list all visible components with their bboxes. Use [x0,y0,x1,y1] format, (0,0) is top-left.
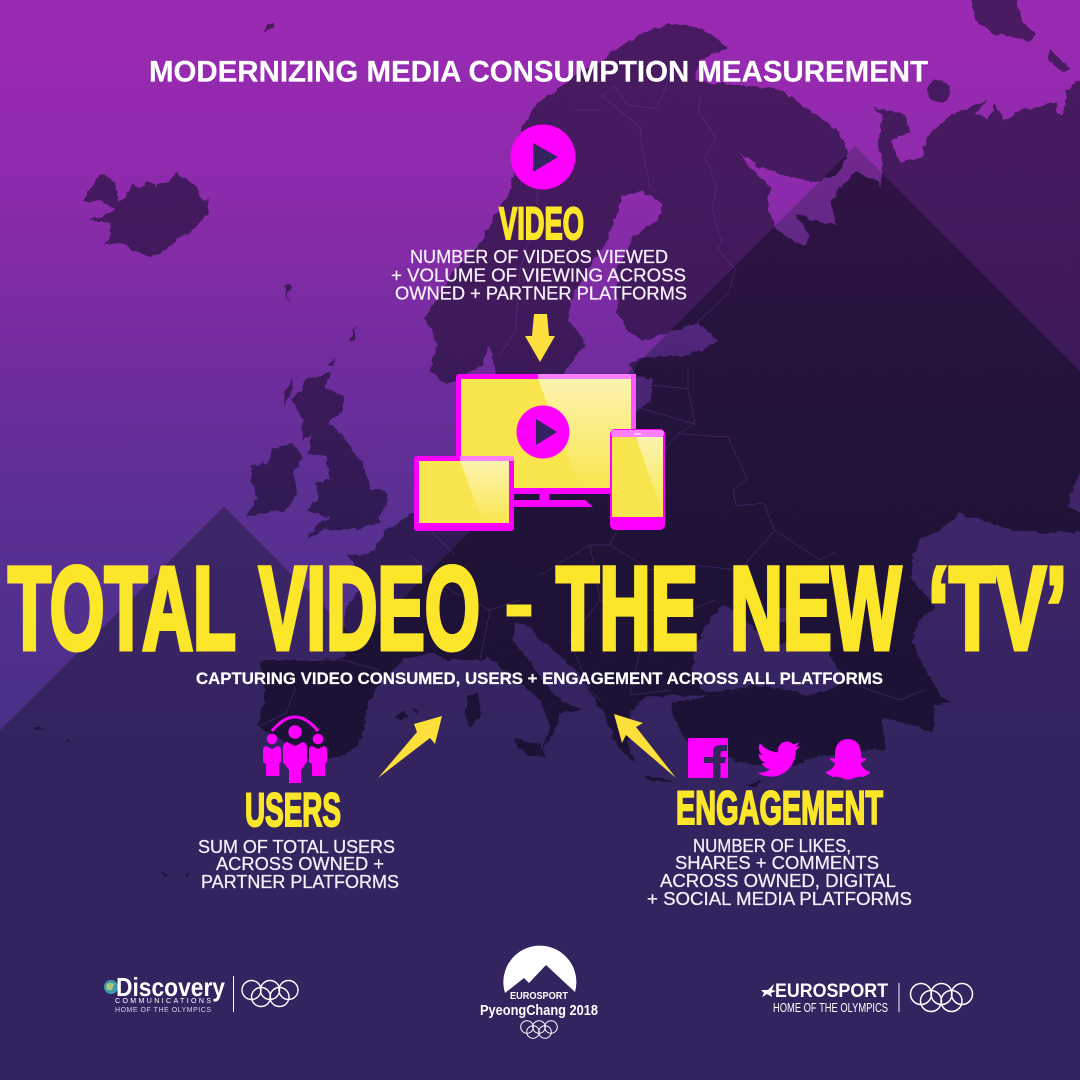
text: engagement description: + SOCIAL MEDIA PLATFORMS [647,889,912,909]
logo: Eurosport PyeongChang 2018 [480,946,598,1038]
text: engagement description: ACROSS OWNED, DIGITAL [660,871,896,891]
logo: Eurosport Home of the Olympics: EUROSPORT [775,981,888,1002]
heading: users: USERS [245,783,341,836]
logo: Eurosport Home of the Olympics [761,981,972,1015]
arrow: engagement to centre [614,714,676,778]
icon: facebook [688,738,728,778]
text: users description: ACROSS OWNED + [216,854,384,874]
arrow: down to devices [525,314,555,362]
title: MODERNIZING MEDIA CONSUMPTION MEASUREMENT [149,56,928,88]
logo: Discovery Communications: Discovery [116,972,225,1002]
logo: Discovery Communications: HOME OF THE OLYMPICS [115,1007,211,1014]
text: engagement description: NUMBER OF LIKES, [693,836,851,856]
mountain circle [503,946,576,993]
text: video description: NUMBER OF VIDEOS VIEWED [410,247,668,267]
olympic rings [242,980,298,1006]
olympic rings [521,1021,557,1038]
text: video description [391,247,687,304]
tablet [414,456,514,531]
country borders [258,83,925,727]
heading: engagement: ENGAGEMENT [676,781,883,834]
logo: Discovery Communications: COMMUNICATIONS [115,998,211,1005]
land outside mountains [33,0,1080,877]
main heading: TOTAL [8,543,236,675]
panel: users [198,717,399,892]
main heading: THE [556,543,698,675]
icon: devices [414,374,665,531]
text: engagement description: SHARES + COMMENTS [675,853,879,873]
logo: Eurosport PyeongChang 2018: EUROSPORT [510,991,568,1002]
icon: twitter [757,742,800,777]
panel: video [391,124,687,304]
heading: video: VIDEO [499,198,584,249]
text: users description [198,837,399,892]
subheading: CAPTURING VIDEO CONSUMED, USERS + ENGAGEMENT ACROSS ALL PLATFORMS [196,669,883,688]
monitor [456,374,636,507]
text: video description: OWNED + PARTNER PLATFORMS [395,284,687,304]
arrow: users to centre [378,716,442,778]
text: engagement description [647,836,912,909]
main heading: NEW [730,543,901,675]
text: users description: PARTNER PLATFORMS [201,872,399,892]
panel: engagement [647,738,912,909]
icon: snapchat [826,739,870,780]
main heading: - [505,562,533,646]
star [761,984,776,997]
globe [104,980,118,994]
icon: users [263,717,327,783]
phone [610,429,665,530]
text: video description: + VOLUME OF VIEWING ACROSS [391,266,686,286]
text: users description: SUM OF TOTAL USERS [198,837,395,857]
main heading: VIDEO [259,543,480,675]
icon: play circle [510,124,576,190]
main heading [8,543,1067,675]
logo: Discovery Communications [104,972,298,1014]
olympic rings [910,984,972,1012]
logo: Eurosport Home of the Olympics: HOME OF THE OLYMPICS [773,1001,888,1015]
logo: Eurosport PyeongChang 2018: PyeongChang 2018 [480,1003,598,1019]
